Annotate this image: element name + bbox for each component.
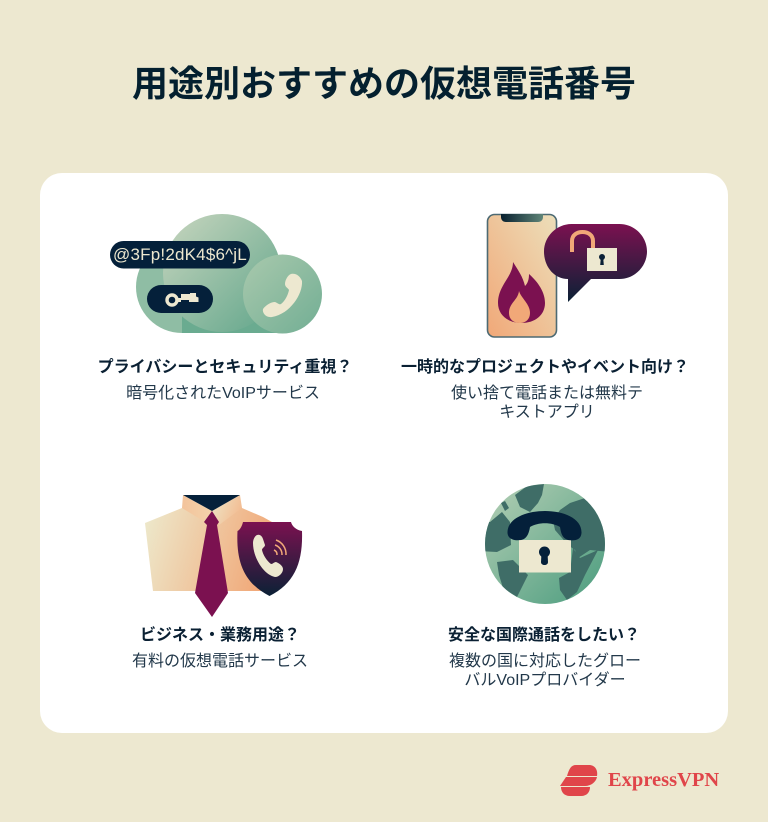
panel: white card (40, 173, 728, 733)
speech bubble (544, 224, 647, 302)
collar (182, 495, 242, 525)
heading: business: ビジネス・業務用途？ (140, 626, 300, 644)
text: temporary: キストアプリ (499, 404, 595, 421)
logo: ExpressVPN mark (560, 765, 597, 796)
heading: international: 安全な国際通話をしたい？ (448, 626, 640, 644)
heading: privacy: プライバシーとセキュリティ重視？ (98, 358, 352, 376)
icon: encrypted cloud phone (110, 214, 322, 334)
shirt (145, 508, 272, 591)
flame (498, 262, 545, 323)
icon: burner phone (488, 214, 647, 337)
heading: temporary: 一時的なプロジェクトやイベント向け？ (401, 358, 689, 376)
icon: globe with lock (478, 484, 610, 604)
handset (507, 511, 582, 540)
password pill (110, 241, 250, 268)
illustrations (110, 214, 647, 796)
open padlock (572, 232, 617, 271)
phone body (488, 214, 556, 337)
text: international: バルVoIPプロバイダー (464, 672, 626, 689)
icon: business shirt (145, 495, 302, 617)
text: privacy: 暗号化されたVoIPサービス (126, 384, 320, 402)
phone circle (243, 254, 322, 334)
text: temporary (451, 384, 643, 421)
text: international: 複数の国に対応したグロー (449, 652, 641, 670)
lock body (519, 540, 571, 572)
title: 用途別おすすめの仮想電話番号 (132, 63, 636, 104)
key pill (147, 285, 213, 313)
text: business: 有料の仮想電話サービス (132, 652, 308, 670)
text: international (449, 652, 641, 689)
logo: ExpressVPN wordmark: ExpressVPN (608, 769, 719, 791)
shield (237, 522, 302, 596)
password pill: @3Fp!2dK4$6^jL (113, 245, 247, 264)
globe (478, 484, 610, 604)
cloud (136, 214, 282, 333)
text: temporary: 使い捨て電話または無料テ (451, 384, 643, 402)
tie (195, 511, 228, 617)
